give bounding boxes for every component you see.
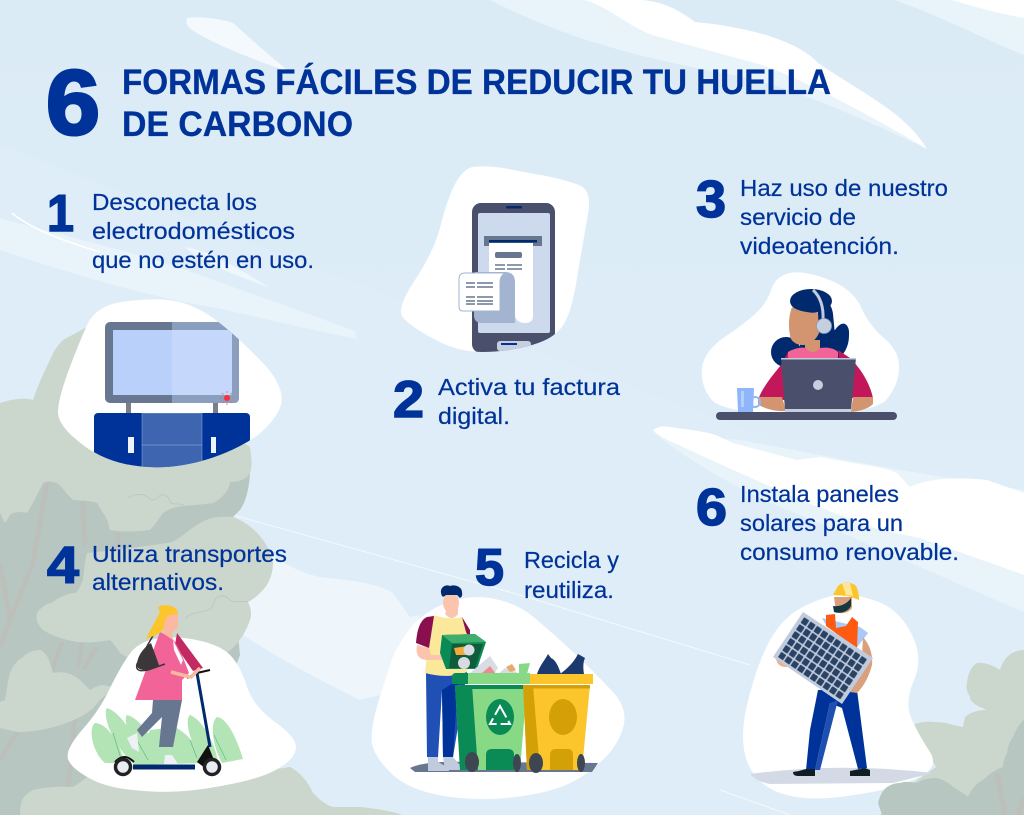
step 6: Instala paneles [740, 481, 899, 507]
step 2 [393, 371, 620, 429]
step 4: Utiliza transportes [92, 541, 287, 567]
title: DE CARBONO [122, 105, 353, 144]
left trees [0, 327, 402, 815]
icon: phone with digital bill [459, 203, 555, 353]
step 3: Haz uso de nuestro [740, 175, 948, 201]
tree trunks right [997, 773, 1024, 815]
step 4: alternativos. [92, 569, 224, 595]
step 1: que no estén en uso. [92, 247, 314, 273]
step 5: 5 [475, 539, 504, 597]
title number: 6 [46, 52, 100, 154]
step 3: videoatención. [740, 233, 899, 259]
step 6: 6 [696, 479, 727, 537]
icon: worker carrying solar panel [750, 583, 933, 784]
icon: woman on scooter [92, 605, 243, 774]
step 5: Recicla y [524, 547, 619, 573]
step 2: 2 [393, 371, 424, 429]
icon: man recycling with bins [410, 585, 598, 773]
step 4 [47, 537, 287, 595]
step 1: 1 [47, 185, 74, 243]
step 3: servicio de [740, 204, 856, 230]
right tree light [880, 650, 1024, 815]
step 4: 4 [47, 537, 79, 595]
step 3 [696, 171, 948, 259]
step 1 [47, 185, 314, 273]
right tree dark [878, 720, 1024, 815]
step 3: 3 [696, 171, 726, 229]
step 6: solares para un [740, 510, 903, 536]
step 1: electrodomésticos [92, 218, 295, 244]
step 6: consumo renovable. [740, 539, 959, 565]
icon: tv on cabinet [94, 322, 250, 474]
step 2: Activa tu factura [438, 374, 620, 400]
panel: blobs [58, 166, 933, 799]
step 1: Desconecta los [92, 189, 257, 215]
title [122, 62, 831, 144]
step 5 [475, 539, 619, 603]
icon: woman with headset and laptop [716, 289, 897, 420]
step 2: digital. [438, 403, 510, 429]
step 6 [696, 479, 959, 565]
step 5: reutiliza. [524, 577, 614, 603]
title: FORMAS FÁCILES DE REDUCIR TU HUELLA [122, 62, 831, 102]
